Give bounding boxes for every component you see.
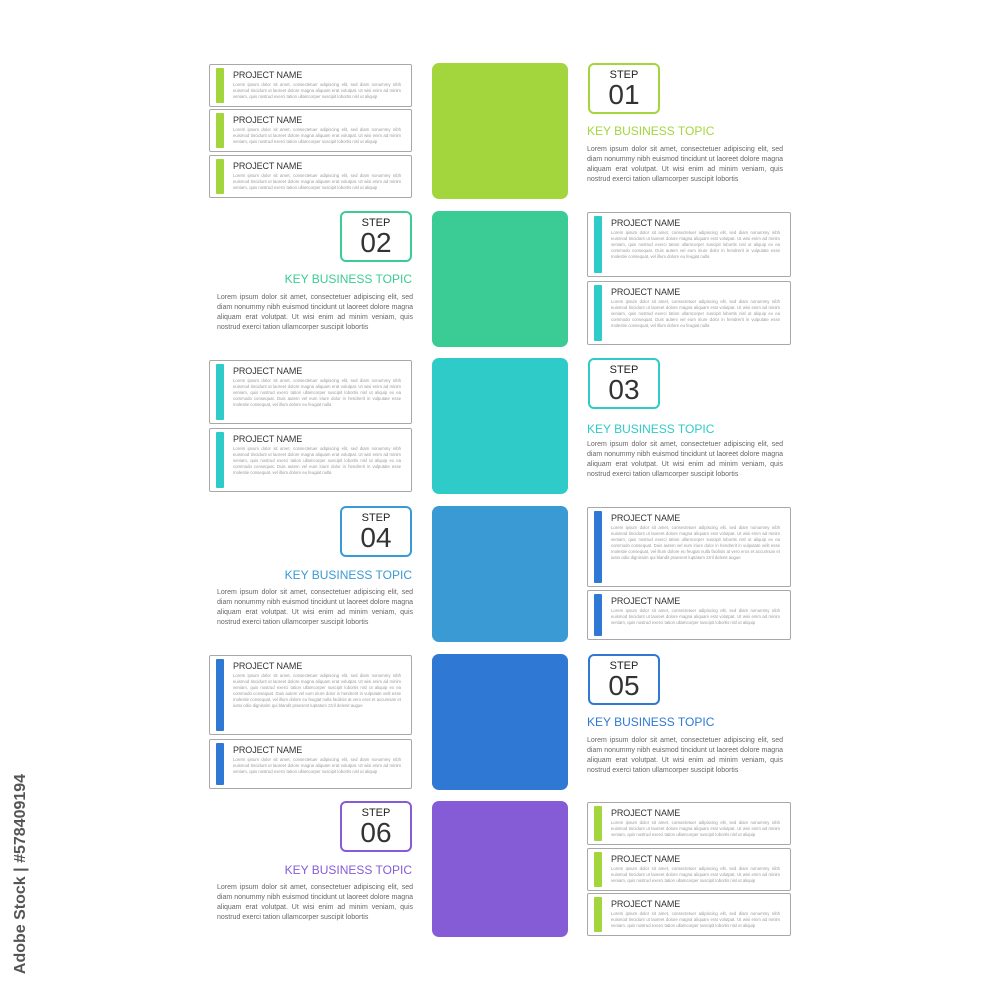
card r2a: Lorem ipsum dolor sit amet, consectetuer adipiscing elit, sed diam nonummy nibh euismod tincidunt ut laoreet dolore magna aliquam erat volutpat. Ut wisi enim ad minim veniam, quis nostrud exerci tation ullamcorper suscipit lobortis nisl ut aliquip ex ea commodo consequat. Duis autem vel eum iriure dolor in hendrerit in vulputate esse molestie consequat, vel illum dolore eu feugiat nulla: [611, 230, 780, 259]
card r3a: PROJECT NAME: [233, 366, 302, 376]
card r4a: PROJECT NAME: [611, 513, 680, 523]
step 06: 06: [360, 817, 392, 848]
step 04: STEP: [362, 512, 390, 524]
card r1b: PROJECT NAME: [233, 115, 302, 125]
card r3a: [209, 360, 412, 424]
text 01: Lorem ipsum dolor sit amet, consectetuer adipiscing elit, sed diam nonummy nibh euismod tincidunt ut laoreet dolore magna aliquam erat volutpat. Ut wisi enim ad minim veniam, quis nostrud exerci tation ullamcorper suscipit lobortis: [587, 146, 783, 183]
card r2b: Lorem ipsum dolor sit amet, consectetuer adipiscing elit, sed diam nonummy nibh euismod tincidunt ut laoreet dolore magna aliquam erat volutpat. Ut wisi enim ad minim veniam, quis nostrud exerci tation ullamcorper suscipit lobortis nisl ut aliquip ex ea commodo consequat. Duis autem vel eum iriure dolor in hendrerit in vulputate esse molestie consequat, vel illum dolore eu feugiat nulla: [611, 299, 780, 328]
card r6a: PROJECT NAME: [611, 808, 680, 818]
card r1b: [209, 109, 412, 152]
step 05: 05: [608, 670, 640, 701]
card r1c: Lorem ipsum dolor sit amet, consectetuer adipiscing elit, sed diam nonummy nibh euismod tincidunt ut laoreet dolore magna aliquam erat volutpat. Ut wisi enim ad minim veniam, quis nostrud exerci tation ullamcorper suscipit lobortis nisl ut aliquip: [233, 173, 401, 190]
step 03: [588, 358, 660, 409]
card r6a: Lorem ipsum dolor sit amet, consectetuer adipiscing elit, sed diam nonummy nibh euismod tincidunt ut laoreet dolore magna aliquam erat volutpat. Ut wisi enim ad minim veniam, quis nostrud exerci tation ullamcorper suscipit lobortis nisl ut aliquip: [611, 820, 780, 837]
card r1c: PROJECT NAME: [233, 161, 302, 171]
card r6c: PROJECT NAME: [611, 899, 680, 909]
card r6b: Lorem ipsum dolor sit amet, consectetuer adipiscing elit, sed diam nonummy nibh euismod tincidunt ut laoreet dolore magna aliquam erat volutpat. Ut wisi enim ad minim veniam, quis nostrud exerci tation ullamcorper suscipit lobortis nisl ut aliquip: [611, 866, 780, 883]
square 2: [432, 211, 568, 347]
card r3b: [209, 428, 412, 492]
card r3a: Lorem ipsum dolor sit amet, consectetuer adipiscing elit, sed diam nonummy nibh euismod tincidunt ut laoreet dolore magna aliquam erat volutpat. Ut wisi enim ad minim veniam, quis nostrud exerci tation ullamcorper suscipit lobortis nisl ut aliquip ex ea commodo consequat. Duis autem vel eum iriure dolor in hendrerit in vulputate esse molestie consequat, vel illum dolore eu feugiat nulla: [233, 378, 401, 407]
card r2a: PROJECT NAME: [611, 218, 680, 228]
card r3b: PROJECT NAME: [233, 434, 302, 444]
step 06: [340, 801, 412, 852]
step 04: 04: [360, 522, 392, 553]
text 03: Lorem ipsum dolor sit amet, consectetuer adipiscing elit, sed diam nonummy nibh euismod tincidunt ut laoreet dolore magna aliquam erat volutpat. Ut wisi enim ad minim veniam, quis nostrud exerci tation ullamcorper suscipit lobortis: [587, 441, 783, 478]
card r1b: Lorem ipsum dolor sit amet, consectetuer adipiscing elit, sed diam nonummy nibh euismod tincidunt ut laoreet dolore magna aliquam erat volutpat. Ut wisi enim ad minim veniam, quis nostrud exerci tation ullamcorper suscipit lobortis nisl ut aliquip: [233, 127, 401, 144]
card r6c: [587, 893, 791, 936]
card r4a: [587, 507, 791, 587]
card r1a: [209, 64, 412, 107]
card r6b: [587, 848, 791, 891]
card r5a: PROJECT NAME: [233, 661, 302, 671]
square 1: [432, 63, 568, 199]
topic 06: KEY BUSINESS TOPIC: [285, 863, 412, 877]
card r6b: PROJECT NAME: [611, 854, 680, 864]
card r4b: Lorem ipsum dolor sit amet, consectetuer adipiscing elit, sed diam nonummy nibh euismod tincidunt ut laoreet dolore magna aliquam erat volutpat. Ut wisi enim ad minim veniam, quis nostrud exerci tation ullamcorper suscipit lobortis nisl ut aliquip: [611, 608, 780, 625]
step 05: [588, 654, 660, 705]
card r5b: Lorem ipsum dolor sit amet, consectetuer adipiscing elit, sed diam nonummy nibh euismod tincidunt ut laoreet dolore magna aliquam erat volutpat. Ut wisi enim ad minim veniam, quis nostrud exerci tation ullamcorper suscipit lobortis nisl ut aliquip: [233, 757, 401, 774]
card r5b: [209, 739, 412, 789]
step 02: [340, 211, 412, 262]
text 04: Lorem ipsum dolor sit amet, consectetuer adipiscing elit, sed diam nonummy nibh euismod tincidunt ut laoreet dolore magna aliquam erat volutpat. Ut wisi enim ad minim veniam, quis nostrud exerci tation ullamcorper suscipit lobortis: [217, 589, 413, 626]
card r5a: [209, 655, 412, 735]
square 5: [432, 654, 568, 790]
card r4a: Lorem ipsum dolor sit amet, consectetuer adipiscing elit, sed diam nonummy nibh euismod tincidunt ut laoreet dolore magna aliquam erat volutpat. Ut wisi enim ad minim veniam, quis nostrud exerci tation ullamcorper suscipit lobortis nisl ut aliquip ex ea commodo consequat. Duis autem vel eum iriure dolor in hendrerit in vulputate velit esse molestie consequat, vel illum dolore eu feugiat nulla facilisis at vero eros et accumsan et iusto odio dignissim qui blandit praesent luptatum zzril delenit augue: [611, 525, 780, 560]
topic 05: KEY BUSINESS TOPIC: [587, 715, 714, 729]
text 06: Lorem ipsum dolor sit amet, consectetuer adipiscing elit, sed diam nonummy nibh euismod tincidunt ut laoreet dolore magna aliquam erat volutpat. Ut wisi enim ad minim veniam, quis nostrud exerci tation ullamcorper suscipit lobortis: [217, 884, 413, 921]
card r6a: [587, 802, 791, 845]
card r5a: Lorem ipsum dolor sit amet, consectetuer adipiscing elit, sed diam nonummy nibh euismod tincidunt ut laoreet dolore magna aliquam erat volutpat. Ut wisi enim ad minim veniam, quis nostrud exerci tation ullamcorper suscipit lobortis nisl ut aliquip ex ea commodo consequat. Duis autem vel eum iriure dolor in hendrerit in vulputate velit esse molestie consequat, vel illum dolore eu feugiat nulla facilisis at vero eros et accumsan et iusto odio dignissim qui blandit praesent luptatum zzril delenit augue: [233, 673, 401, 708]
step 03: STEP: [610, 364, 638, 376]
topic 03: KEY BUSINESS TOPIC: [587, 422, 714, 436]
card r2b: PROJECT NAME: [611, 287, 680, 297]
card r1a: Lorem ipsum dolor sit amet, consectetuer adipiscing elit, sed diam nonummy nibh euismod tincidunt ut laoreet dolore magna aliquam erat volutpat. Ut wisi enim ad minim veniam, quis nostrud exerci tation ullamcorper suscipit lobortis nisl ut aliquip: [233, 82, 401, 99]
card r6c: Lorem ipsum dolor sit amet, consectetuer adipiscing elit, sed diam nonummy nibh euismod tincidunt ut laoreet dolore magna aliquam erat volutpat. Ut wisi enim ad minim veniam, quis nostrud exerci tation ullamcorper suscipit lobortis nisl ut aliquip: [611, 911, 780, 928]
card r1a: PROJECT NAME: [233, 70, 302, 80]
topic 01: KEY BUSINESS TOPIC: [587, 124, 714, 138]
step 02: 02: [360, 227, 392, 258]
topic 04: KEY BUSINESS TOPIC: [285, 568, 412, 582]
step 03: 03: [608, 374, 640, 405]
step 06: STEP: [362, 807, 390, 819]
step 04: [340, 506, 412, 557]
card r4b: PROJECT NAME: [611, 596, 680, 606]
step 05: STEP: [610, 660, 638, 672]
step 01: STEP: [610, 69, 638, 81]
text 02: Lorem ipsum dolor sit amet, consectetuer adipiscing elit, sed diam nonummy nibh euismod tincidunt ut laoreet dolore magna aliquam erat volutpat. Ut wisi enim ad minim veniam, quis nostrud exerci tation ullamcorper suscipit lobortis: [217, 294, 413, 331]
card r2b: [587, 281, 791, 345]
step 01: 01: [608, 79, 640, 110]
card r3b: Lorem ipsum dolor sit amet, consectetuer adipiscing elit, sed diam nonummy nibh euismod tincidunt ut laoreet dolore magna aliquam erat volutpat. Ut wisi enim ad minim veniam, quis nostrud exerci tation ullamcorper suscipit lobortis nisl ut aliquip ex ea commodo consequat. Duis autem vel eum iriure dolor in hendrerit in vulputate esse molestie consequat, vel illum dolore eu feugiat nulla: [233, 446, 401, 475]
square 6: [432, 801, 568, 937]
square 4: [432, 506, 568, 642]
card r5b: PROJECT NAME: [233, 745, 302, 755]
step 02: STEP: [362, 217, 390, 229]
card r4b: [587, 590, 791, 640]
topic 02: KEY BUSINESS TOPIC: [285, 272, 412, 286]
square 3: [432, 358, 568, 494]
step 01: [588, 63, 660, 114]
card r2a: [587, 212, 791, 277]
watermark: Adobe Stock | #578409194: [12, 774, 29, 974]
card r1c: [209, 155, 412, 198]
text 05: Lorem ipsum dolor sit amet, consectetuer adipiscing elit, sed diam nonummy nibh euismod tincidunt ut laoreet dolore magna aliquam erat volutpat. Ut wisi enim ad minim veniam, quis nostrud exerci tation ullamcorper suscipit lobortis: [587, 737, 783, 774]
